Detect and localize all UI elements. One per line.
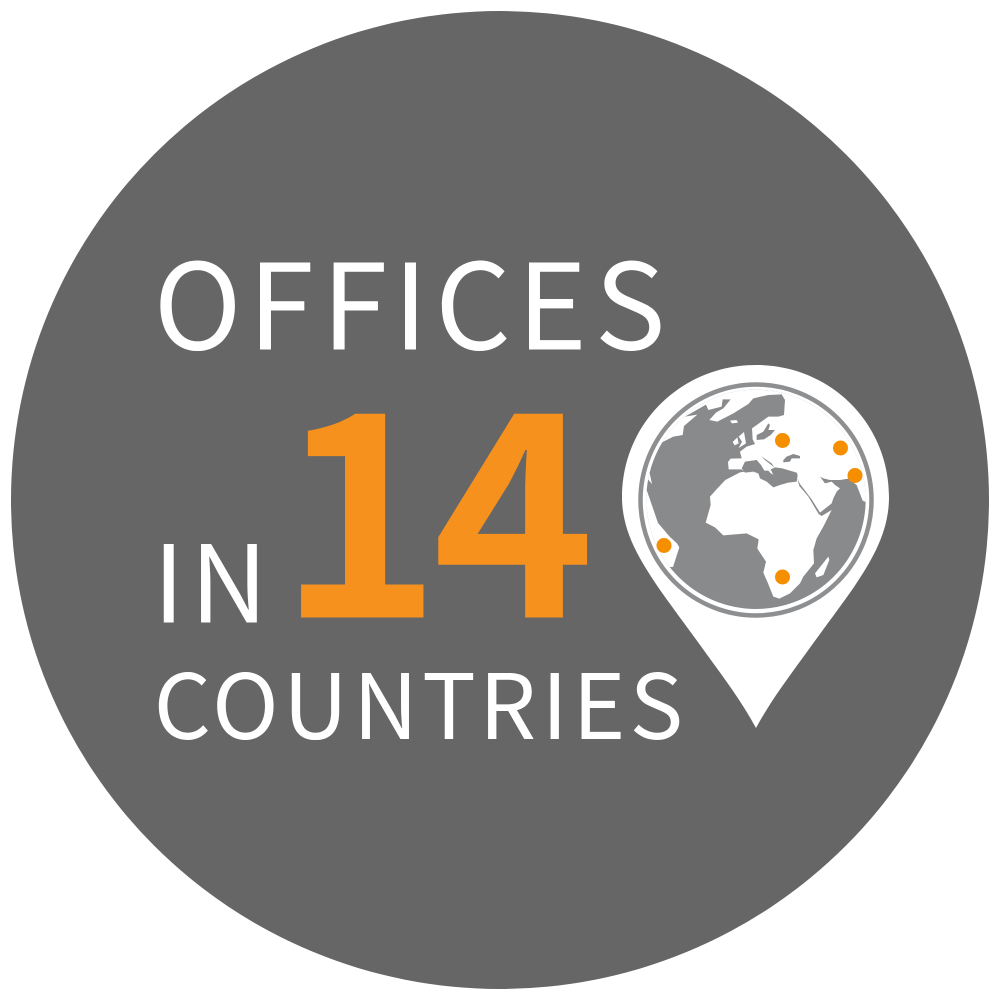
ireland bbox=[733, 437, 739, 445]
eurasia bbox=[728, 392, 866, 512]
americas and greenland bbox=[646, 390, 782, 567]
baltic sea bbox=[757, 423, 775, 440]
land masses bbox=[646, 390, 866, 599]
adriatic sea bbox=[761, 456, 774, 467]
office marker: south africa bbox=[775, 570, 790, 584]
number: 14: 14 bbox=[278, 300, 595, 698]
office marker: russia bbox=[775, 433, 790, 448]
icon: map pin with globe bbox=[622, 363, 907, 728]
pin shape bbox=[622, 365, 889, 728]
globe outer ring bbox=[640, 384, 872, 616]
madagascar bbox=[815, 557, 829, 577]
text: in: IN bbox=[153, 498, 268, 654]
africa bbox=[706, 472, 832, 599]
office marker: central asia bbox=[833, 440, 848, 456]
office marker: south asia bbox=[848, 468, 862, 483]
black sea bbox=[783, 454, 800, 462]
mediterranean sea bbox=[742, 460, 798, 487]
text: countries: COUNTRIES bbox=[154, 635, 683, 765]
iceland bbox=[730, 420, 738, 423]
britain bbox=[739, 432, 746, 448]
ocean bbox=[646, 390, 866, 609]
globe bbox=[646, 390, 866, 609]
heading: offices: OFFICES bbox=[154, 212, 666, 384]
office marker: south america bbox=[656, 538, 672, 553]
